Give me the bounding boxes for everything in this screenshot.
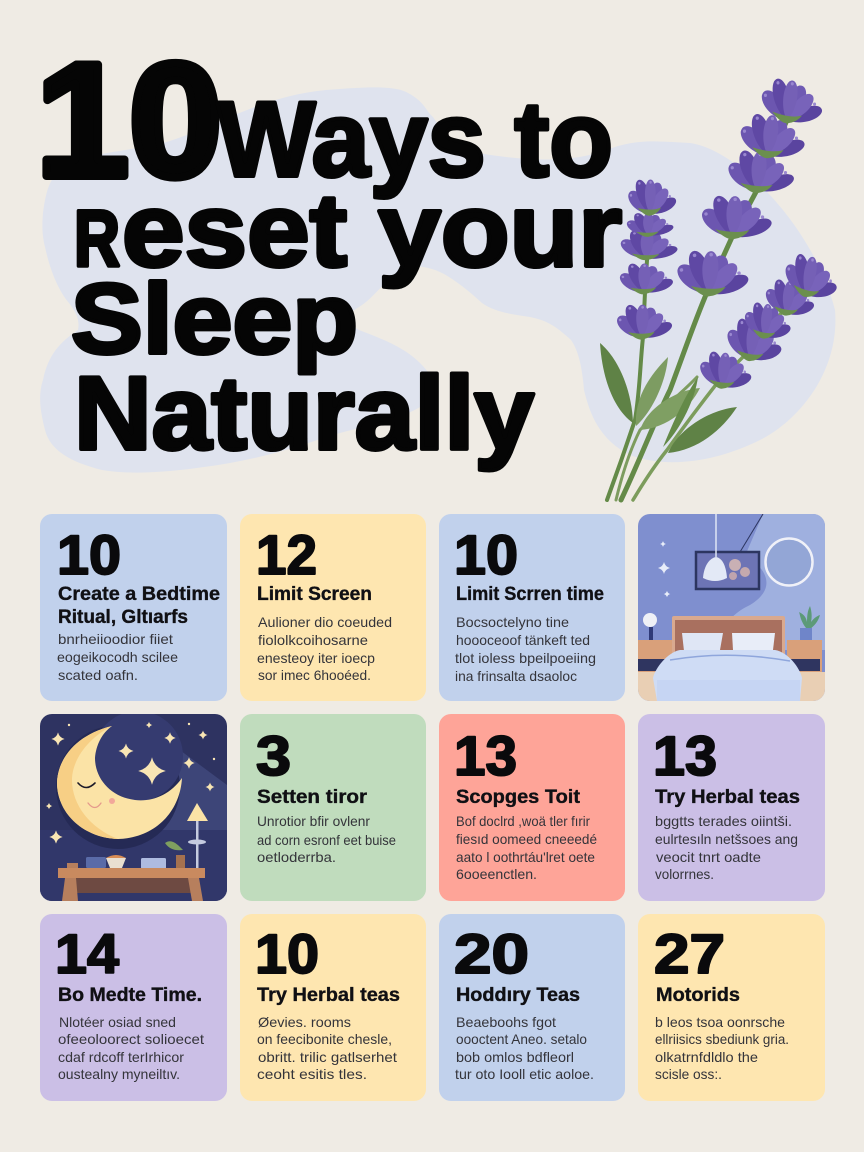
panel: tip 14: Nlotéer osiad sned — [59, 1014, 176, 1030]
panel: tip 10 limit screen time: 10 — [454, 523, 518, 586]
panel: tip 20: oooctent Aneo. setalo — [456, 1031, 587, 1047]
stars — [46, 722, 215, 844]
table lamp — [643, 613, 657, 627]
panel: tip 20 — [439, 914, 625, 1101]
panel: tip 10 limit screen time: hoooceoof tänkeft ted — [456, 632, 590, 648]
panel: tip 13 purple: veocit tnrt oadte — [656, 849, 761, 865]
panel: tip 14: oustealny myneiltıv. — [58, 1066, 180, 1082]
potted plant — [799, 606, 820, 629]
stems — [607, 120, 787, 500]
panel: tip 10 bedtime ritual: 10 — [57, 523, 121, 586]
floor — [638, 672, 825, 701]
panel: tip 10 limit screen time: ina frinsalta dsaoloc — [455, 668, 577, 684]
panel: tip 20: Beaeboohs fgot — [456, 1014, 556, 1030]
panel: tip 10 limit screen time: Bocsoctelyno tine — [456, 614, 569, 630]
panel: tip 3: ad corn esronf eet buise — [257, 832, 396, 848]
leaves — [600, 343, 633, 423]
panel: tip 10 herbal teas: on feecibonite chesle, — [257, 1031, 392, 1047]
panel: tip 10 limit screen time: Limit Scrren time — [456, 584, 604, 605]
panel: tip 10 herbal teas: 10 — [255, 922, 319, 985]
panel: tip 13 purple: bggtts terades oiintši. — [655, 813, 792, 829]
moon face — [78, 783, 95, 788]
panel: tip 27: 27 — [654, 922, 725, 985]
panel: tip 12 limit screen: Aulioner dio coeuded — [258, 614, 392, 630]
nightstands — [638, 640, 672, 672]
crescent moon — [57, 726, 182, 839]
wall picture — [696, 552, 759, 589]
leaf — [165, 841, 183, 850]
panel: moon illustration — [40, 711, 227, 901]
panel: tip 13 purple: 13 — [653, 724, 717, 787]
lamp — [187, 803, 208, 821]
panel: tip 20: Hoddıry Teas — [456, 985, 580, 1006]
panel: tip 13 coral: Scopges Toit — [456, 787, 581, 808]
panel: tip 13 coral: 13 — [454, 724, 517, 787]
blossoms — [610, 296, 675, 348]
title: Naturally — [74, 356, 534, 472]
title: R — [74, 194, 120, 283]
panel: tip 20: tur oto Iooll etic aoloe. — [455, 1066, 594, 1082]
panel: tip 13 purple: eulrtesıln netšsoes ang — [655, 831, 798, 847]
panel: tip 27: b leos tsoa oonrsche — [655, 1014, 785, 1030]
panel: tip 10 herbal teas: obritt. trilic gatlserhet — [258, 1049, 397, 1065]
panel: tip 27 — [638, 914, 825, 1101]
panel: tip 10 bedtime ritual: scated oafn. — [58, 667, 138, 683]
panel: tip 27: olkatrnfdldlo the — [655, 1049, 758, 1065]
panel: tip 12 limit screen: enesteoy iter ioecp — [257, 650, 375, 666]
moon shadow — [56, 725, 180, 849]
panel: tip 27: Motorids — [656, 985, 740, 1006]
title: eset your — [122, 173, 622, 289]
panel: tip 14: cdaf rdcoff terIrhicor — [58, 1049, 184, 1065]
panel: tip 27: ellriisics sbediunk gria. — [655, 1031, 789, 1047]
panel: tip 14: ofeeoloorect solioecet — [58, 1031, 204, 1047]
panel: tip 27: scisle oss:. — [655, 1066, 722, 1082]
panel: tip 20: 20 — [454, 922, 529, 985]
panel: bedroom illustration — [638, 514, 825, 701]
panel: tip 13 purple: Try Herbal teas — [655, 787, 800, 808]
round mirror — [766, 538, 812, 586]
pendant lamp — [715, 514, 717, 557]
panel: tip 10 bedtime ritual: Create a Bedtime — [58, 584, 220, 605]
title: 10 — [36, 30, 222, 211]
panel: tip 13 coral: Bof doclrd ,woä tler fırir — [456, 813, 590, 829]
panel: tip 10 bedtime ritual: Ritual, Gltıarfs — [58, 607, 188, 628]
panel: tip 10 bedtime ritual: eogeikocodh scilee — [57, 649, 178, 665]
panel: tip 12 limit screen: 12 — [256, 523, 317, 586]
table — [58, 868, 205, 878]
panel: tip 10 bedtime ritual: bnrheiioodior fiiet — [58, 631, 173, 647]
bed — [653, 650, 802, 701]
panel: tip 10 herbal teas: Try Herbal teas — [257, 985, 400, 1006]
panel: tip 13 purple: volorrnes. — [655, 866, 714, 882]
table items — [86, 857, 106, 868]
panel: tip 3: 3 — [256, 724, 291, 787]
panel: tip 12 limit screen: sor imec 6hooéed. — [258, 667, 371, 683]
panel: tip 10 herbal teas: ceoht esitis tles. — [257, 1066, 367, 1082]
title: Ways to — [217, 79, 613, 199]
panel: tip 10 herbal teas: Øevies. rooms — [258, 1014, 351, 1030]
pillows — [682, 633, 723, 651]
panel: tip 3: oetloderrba. — [257, 849, 336, 865]
panel: tip 14 — [40, 914, 227, 1101]
panel: tip 10 limit screen time — [439, 514, 625, 701]
panel: tip 20: bob omlos bdfleorl — [456, 1049, 574, 1065]
panel: tip 10 limit screen time: tlot ioless bpeilpoeiing — [455, 650, 596, 666]
title — [36, 30, 622, 472]
panel: tip 14: 14 — [55, 922, 119, 985]
panel: tip 13 purple — [638, 714, 825, 901]
panel: tip 3: Unrotior bfir ovlenr — [257, 813, 370, 829]
panel: tip 13 coral: 6ooeenctlen. — [456, 866, 537, 882]
icon: lavender sprigs — [600, 74, 838, 500]
panel: tip 3: Setten tiror — [257, 787, 368, 808]
panel: tip 10 bedtime ritual — [40, 514, 227, 701]
panel: tip 3 — [240, 714, 426, 901]
panel: tip 14: Bo Medte Time. — [58, 985, 202, 1006]
panel: tip 13 coral: aato l oothrtáu'lret oete — [456, 849, 595, 865]
background blob — [40, 87, 835, 473]
panel: tip 12 limit screen: Limit Screen — [257, 584, 372, 605]
panel: tip 13 coral — [439, 714, 625, 901]
headboard — [672, 616, 785, 654]
wall stars — [660, 541, 666, 547]
panel: tip 12 limit screen: fiololkcoihosarne — [258, 632, 368, 648]
title: Sleep — [71, 263, 358, 374]
panel: tip 10 herbal teas — [240, 914, 426, 1101]
panel: tip 12 limit screen — [240, 514, 426, 701]
panel: tip 13 coral: fiesıd oomeed cneeedé — [456, 831, 597, 847]
ceiling line — [740, 514, 763, 552]
